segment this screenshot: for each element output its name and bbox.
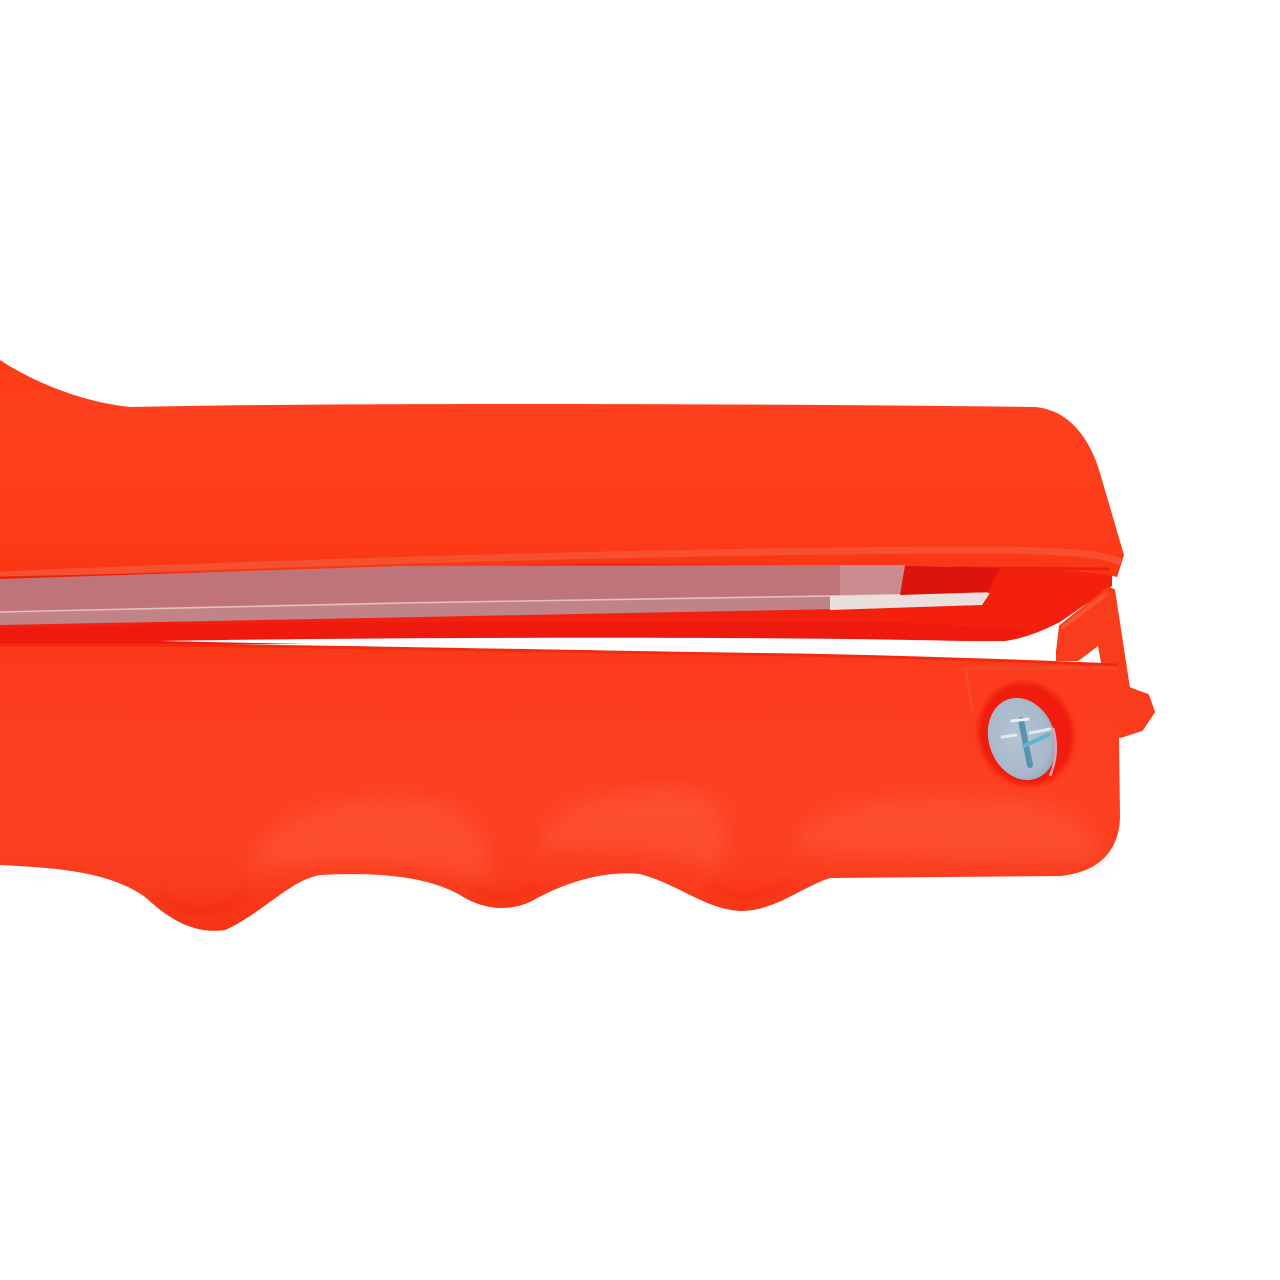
top edge line (0, 645, 1118, 665)
hinge strap (1056, 588, 1154, 737)
top handle (0, 360, 1124, 578)
white gap (160, 626, 1101, 663)
screw head (977, 688, 1067, 790)
grip rear shadow (160, 880, 790, 911)
bottom handle (0, 644, 1120, 931)
screw recess (965, 670, 1087, 798)
raised corner (965, 666, 1117, 712)
blade (0, 565, 1000, 625)
finger grip shading (245, 789, 1100, 880)
top handle lip (0, 550, 1121, 575)
dark red inner jaw (0, 568, 1112, 648)
phillips cross (1002, 719, 1050, 765)
